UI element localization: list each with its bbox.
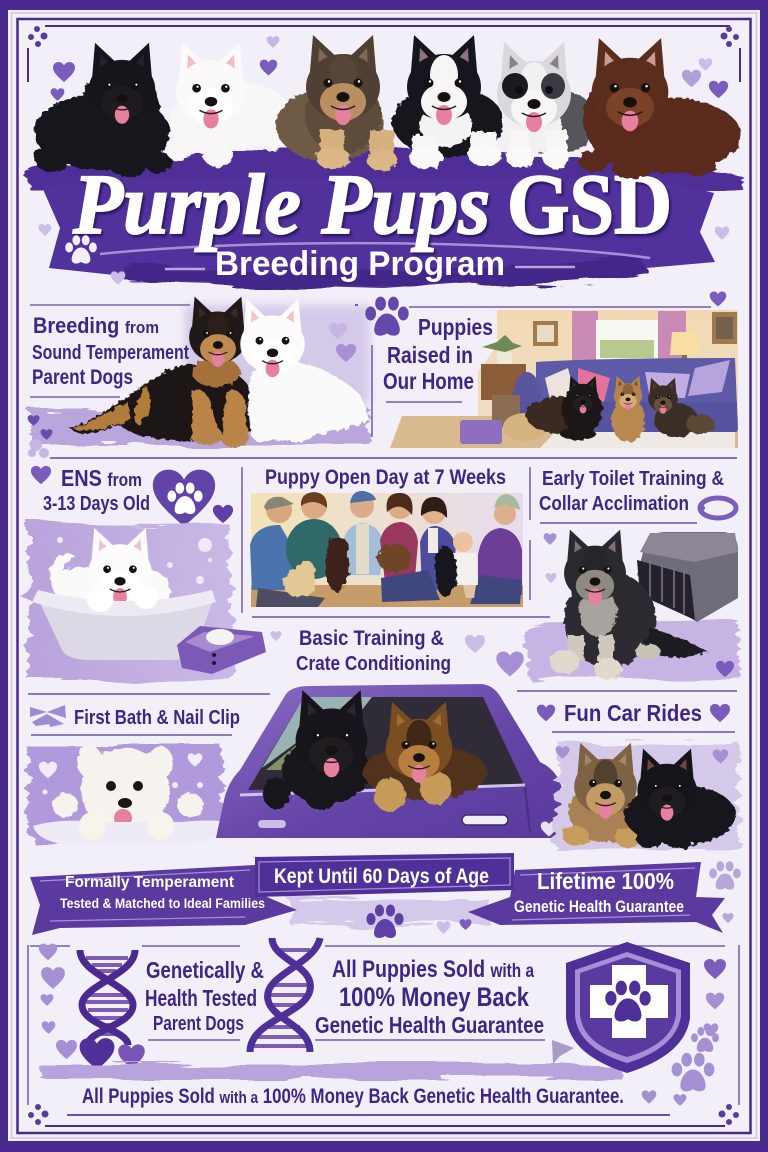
person 3 (342, 491, 384, 575)
heading text: ENS from (61, 465, 142, 491)
text: genetically and health tested (145, 957, 264, 1035)
sofa (513, 358, 738, 432)
pup: brown (578, 38, 741, 179)
ribbon: kept until 60 days of age (255, 853, 514, 897)
heading text (32, 313, 189, 389)
black pup (263, 690, 370, 810)
wall (478, 310, 738, 420)
black pup (624, 749, 736, 849)
panel: fun car rides (517, 691, 740, 850)
wash (28, 746, 222, 840)
ribbon: formally temperament tested: Tested & Matched to Ideal Families (60, 896, 265, 911)
door details (258, 787, 557, 836)
ribbon: lifetime guarantee: Lifetime 100% (537, 868, 674, 894)
room pups (526, 376, 714, 442)
side hearts and dots (28, 439, 51, 484)
heading text (383, 314, 493, 394)
heading text: Breeding from (33, 313, 159, 338)
floor (390, 416, 738, 448)
icon: DNA helix right (250, 938, 320, 1052)
heading text: Puppies (418, 314, 493, 340)
brush band behind the pups (25, 148, 745, 190)
panel wash (28, 305, 370, 445)
car illustration (216, 684, 564, 838)
heading text: Our Home (383, 368, 474, 394)
decorative paws and hearts (366, 861, 741, 938)
ribbon: kept until 60 days of age: Kept Until 60 Days of Age (274, 865, 489, 888)
dog: white parent (240, 299, 370, 442)
wash stripe (40, 1064, 620, 1078)
icon: big heart with paw (153, 470, 233, 526)
panel: basic training and crate conditioning: Basic Training & (299, 627, 444, 650)
hearts (270, 631, 485, 653)
icon: ribbon bow (30, 705, 66, 727)
icon: DNA helix left (80, 950, 135, 1045)
puppies (283, 537, 457, 597)
wash behind ribbons (290, 900, 490, 925)
hearts (496, 533, 734, 677)
hearts (537, 704, 730, 722)
text: genetically and health tested: Parent Dogs (153, 1013, 244, 1035)
paws right (672, 1027, 719, 1091)
title banner (25, 148, 745, 288)
seated legs (256, 570, 522, 607)
brown pup (363, 702, 487, 812)
panel: basic training and crate conditioning: Crate Conditioning (296, 653, 451, 675)
panel: puppies raised in our home (355, 292, 738, 448)
text: genetically and health tested: Genetically & (146, 957, 264, 983)
person 1 (250, 497, 300, 590)
window sill (240, 785, 525, 795)
bowl (177, 626, 266, 674)
panel: basic training and crate conditioning (270, 627, 485, 675)
panel: puppy open day at 7 weeks (250, 466, 550, 617)
ribbon stripes (100, 243, 650, 258)
toddler (453, 532, 478, 598)
heading text: 3-13 Days Old (43, 493, 150, 515)
icon: heart (710, 292, 726, 306)
person 4 (380, 493, 418, 590)
heading text: Sound Temperament (32, 342, 189, 364)
tan pup (563, 743, 641, 848)
tub and paws (33, 812, 228, 845)
panel: first bath and nail clip (28, 694, 270, 845)
puppy row (34, 35, 741, 179)
floor wash (525, 620, 740, 680)
lamp (670, 332, 700, 363)
ribbon: formally temperament tested: Formally Temperament (65, 874, 235, 891)
title text: GSD (507, 156, 672, 252)
panel: ENS from 3-13 days old (28, 465, 266, 680)
heading text: Early Toilet Training & (542, 468, 724, 490)
basket, box and cushion (460, 395, 547, 444)
banner hearts (111, 271, 125, 285)
top hearts (39, 36, 729, 240)
title text: Purple Pups (72, 156, 490, 252)
icon: paw (365, 297, 409, 336)
panel: genetic health (28, 938, 739, 1105)
pictures (533, 312, 737, 346)
icon: hearts under helix (56, 1038, 145, 1070)
dog: german shepherd parent (69, 297, 250, 448)
icon: banner paw (65, 235, 97, 264)
person 5 (420, 497, 456, 590)
pup: black and white (392, 35, 504, 169)
photo illustration (250, 491, 523, 607)
subtitle: Breeding Program (215, 245, 505, 283)
heading text (43, 465, 150, 515)
side table and plant (481, 335, 526, 400)
pup: black (34, 43, 172, 177)
heading text (539, 468, 724, 515)
room illustration (390, 310, 738, 448)
text: money back guarantee: All Puppies Sold with a (332, 956, 534, 983)
hearts (28, 323, 356, 440)
ribbon: lifetime guarantee (468, 862, 725, 933)
tub (32, 585, 216, 660)
pup: white (166, 42, 292, 167)
ribbon (42, 178, 715, 288)
side hearts (39, 944, 726, 1037)
panel: early toilet training and collar acclimation (496, 468, 740, 680)
body (216, 684, 564, 838)
person 2 (286, 492, 342, 579)
heading: Puppy Open Day at 7 Weeks (265, 466, 506, 489)
wash (28, 522, 232, 680)
heading: First Bath & Nail Clip (74, 707, 240, 729)
text: money back guarantee (315, 956, 544, 1038)
ribbon: formally temperament tested (30, 865, 297, 935)
sitting pup (550, 530, 708, 680)
puppy in tub (50, 528, 170, 612)
text: genetically and health tested: Health Tested (145, 985, 257, 1011)
crate (637, 532, 738, 622)
text: money back guarantee: Genetic Health Guarantee (315, 1012, 544, 1038)
icon: collar (699, 498, 736, 518)
heading text: Collar Acclimation (539, 493, 689, 515)
pup: sable (276, 35, 397, 171)
heading: Fun Car Rides (564, 700, 702, 726)
window (248, 697, 525, 790)
icon: shield (566, 942, 690, 1073)
small plane-like accent (552, 1040, 574, 1064)
person 6 (478, 494, 522, 600)
wash (555, 742, 740, 850)
bubbles (39, 753, 203, 802)
footer line: All Puppies Sold with a 100% Money Back Genetic Health Guarantee. (82, 1085, 624, 1108)
text: money back guarantee: 100% Money Back (339, 982, 530, 1012)
pup: black white and grey (497, 42, 598, 168)
pup head (52, 746, 203, 832)
bubbles (57, 537, 212, 584)
heading text: Parent Dogs (32, 366, 133, 389)
ribbon: lifetime guarantee: Genetic Health Guarantee (514, 897, 684, 916)
heading text: Raised in (387, 342, 473, 368)
curtains and window (572, 311, 686, 361)
panel: breeding from sound temperament parent dogs (28, 297, 370, 448)
